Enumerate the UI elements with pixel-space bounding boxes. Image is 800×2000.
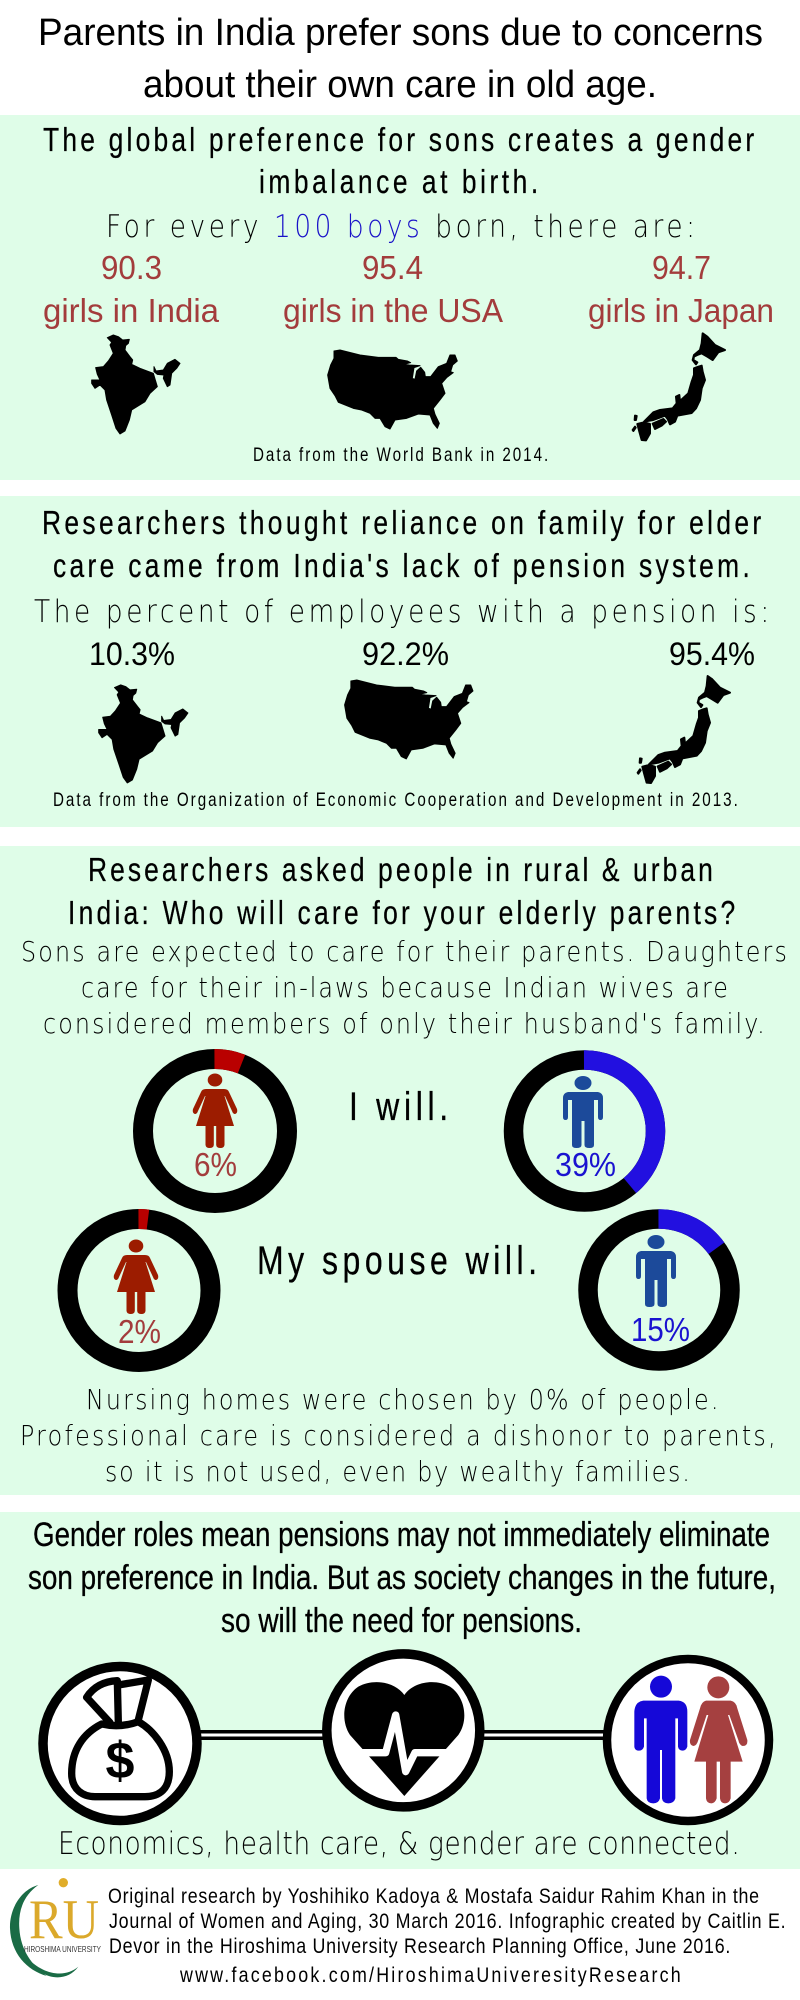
text block: sons and daughters: care for their in-laws because Indian wives are <box>81 972 728 1005</box>
donut: women spouse 2%: 2% <box>118 1313 161 1350</box>
text block: nursing homes: so it is not used, even by wealthy families. <box>105 1456 690 1489</box>
heading: global preference: The global preference for sons creates a gender <box>43 122 754 159</box>
donut: men spouse 15%: 15% <box>631 1311 690 1348</box>
logo: Hiroshima University: RU <box>29 1889 99 1951</box>
stat: India pension: 10.3% <box>89 636 175 672</box>
text block: nursing homes: Nursing homes were chosen by 0% of people. <box>86 1384 718 1417</box>
icon: money bag: $ <box>106 1732 135 1790</box>
icon: money bag <box>43 1666 197 1820</box>
stat: USA pension: 92.2% <box>362 636 449 672</box>
stat: USA girls <box>283 249 503 329</box>
title: Parents in India prefer sons due to concerns <box>38 12 763 54</box>
icon: heart with pulse <box>327 1654 480 1807</box>
heading: survey question: India: Who will care for your elderly parents? <box>68 895 735 932</box>
connector: heart to people <box>482 1730 607 1740</box>
panel: who will care <box>0 846 800 1495</box>
credits text: Devor in the Hiroshima University Research Planning Office, June 2016. <box>109 1935 730 1958</box>
stat: USA girls: 95.4 <box>362 249 423 286</box>
heading: gender roles: so will the need for pensions. <box>221 1602 582 1640</box>
map: India <box>99 685 188 783</box>
panel: gender imbalance at birth <box>0 115 800 480</box>
credits text: Original research by Yoshihiko Kadoya & Mostafa Saidur Rahim Khan in the <box>108 1885 759 1908</box>
panel: conclusion <box>0 1512 800 1869</box>
stat: Japan girls <box>588 249 774 329</box>
label: my spouse will: My spouse will. <box>257 1238 537 1283</box>
label: I will: I will. <box>349 1084 448 1129</box>
title <box>38 12 763 106</box>
map: USA <box>345 680 473 759</box>
credits text <box>108 1885 786 1987</box>
map: Japan <box>638 676 730 783</box>
text block: nursing homes: Professional care is considered a dishonor to parents, <box>20 1420 776 1453</box>
heading: reliance on family <box>42 505 761 585</box>
logo: Hiroshima University: HIROSHIMA UNIVERSITY <box>24 1944 101 1954</box>
stat: Japan girls: 94.7 <box>652 249 711 286</box>
connector: money to heart <box>199 1730 327 1740</box>
donut: men spouse 15% <box>588 1219 730 1361</box>
map: USA <box>328 350 457 429</box>
source note: World Bank: Data from the World Bank in 2014. <box>253 443 548 465</box>
stat: Japan girls: girls in Japan <box>588 292 774 329</box>
credits text: Journal of Women and Aging, 30 March 2016. Infographic created by Caitlin E. <box>109 1910 786 1933</box>
donut: men I will 39%: 39% <box>555 1146 616 1183</box>
text block: sons and daughters: Sons are expected to care for their parents. Daughters <box>21 936 787 969</box>
logo: Hiroshima University <box>10 1878 101 1977</box>
stat: USA girls: girls in the USA <box>283 292 503 329</box>
panel: pension systems <box>0 496 800 827</box>
subheading: percent with a pension: The percent of employees with a pension is: <box>34 593 769 630</box>
stat: India girls: 90.3 <box>101 249 162 286</box>
map: Japan <box>633 333 725 440</box>
text block: sons and daughters: considered members of only their husband's family. <box>43 1008 765 1041</box>
donut: women spouse 2% <box>68 1219 210 1362</box>
stat: Japan pension: 95.4% <box>669 636 755 672</box>
subheading: for every 100 boys: For every 100 boys born, there are: <box>106 208 695 245</box>
donut: women I will 6%: 6% <box>194 1146 237 1183</box>
donut: women I will 6% <box>143 1059 287 1203</box>
heading: reliance on family: care came from India's lack of pension system. <box>53 548 750 585</box>
heading: survey question: Researchers asked people in rural & urban <box>88 852 713 889</box>
donut: men I will 39% <box>514 1060 656 1202</box>
heading: gender roles <box>28 1516 776 1640</box>
credits text: www.facebook.com/HiroshimaUniveresityResearch <box>179 1964 681 1987</box>
map: India <box>92 335 180 434</box>
title: about their own care in old age. <box>143 64 657 106</box>
heading: global preference: imbalance at birth. <box>259 164 538 201</box>
caption: connected: Economics, health care, & gender are connected. <box>58 1825 740 1862</box>
icon: man and woman <box>607 1659 769 1821</box>
heading: global preference <box>43 122 754 201</box>
text block: sons and daughters <box>21 936 787 1041</box>
heading: reliance on family: Researchers thought reliance on family for elder <box>42 505 761 542</box>
heading: survey question <box>68 852 735 932</box>
stat: India girls <box>43 249 220 329</box>
text block: nursing homes <box>20 1384 776 1489</box>
source note: OECD: Data from the Organization of Economic Cooperation and Development in 2013. <box>53 788 738 810</box>
stat: India girls: girls in India <box>43 292 220 329</box>
